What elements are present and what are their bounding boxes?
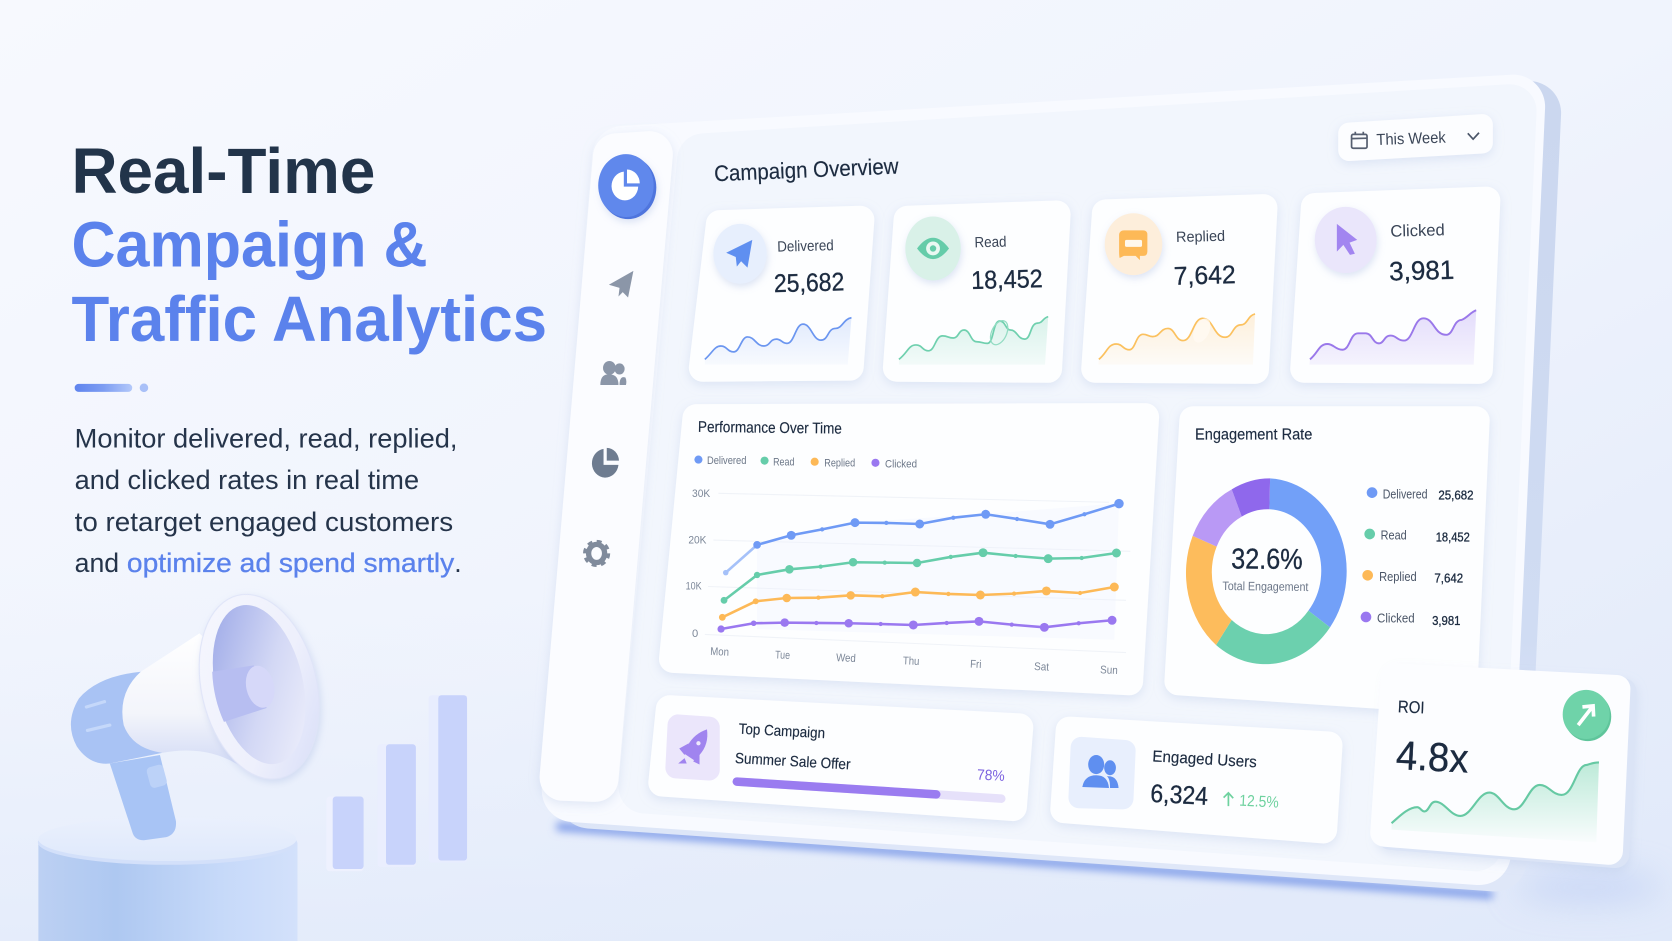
pedestal	[38, 817, 298, 941]
panel: read card: 18,452	[971, 265, 1043, 295]
description text: and	[75, 548, 119, 578]
donut legend: Read	[1381, 527, 1407, 542]
area under lines	[757, 503, 1119, 640]
panel: performance over time	[673, 417, 1145, 681]
panel: engaged users: 6,324	[1150, 780, 1209, 811]
panel: replied card: Replied	[1176, 228, 1225, 246]
sparkline: read	[899, 317, 1048, 365]
panel: sidebar	[563, 154, 656, 778]
donut legend	[1361, 486, 1474, 628]
sparkline: replied	[1098, 314, 1255, 365]
panel: engagement rate: Engagement Rate	[1195, 426, 1312, 443]
x axis labels: Thu	[903, 655, 920, 668]
donut legend: Replied	[1379, 569, 1417, 584]
date filter	[1349, 125, 1482, 150]
y axis labels	[686, 488, 711, 640]
icon: clicked cursor	[1315, 207, 1377, 273]
icon: send	[609, 271, 633, 298]
icon: megaphone	[71, 582, 336, 840]
panel: replied card	[1095, 208, 1264, 370]
description text: optimize ad spend smartly	[127, 548, 455, 578]
title: Campaign &	[71, 209, 428, 281]
series: delivered	[723, 499, 1124, 575]
icon: roi arrow	[1563, 690, 1611, 741]
panel: clicked card: 3,981	[1389, 255, 1455, 286]
panel: delivered card: 25,682	[774, 268, 845, 298]
panel: read card	[897, 214, 1057, 369]
series: clicked	[717, 616, 1117, 633]
donut legend: Clicked	[1377, 611, 1415, 626]
donut legend: Delivered	[1383, 486, 1427, 501]
panel: roi card	[1384, 677, 1623, 854]
donut centre value: 32.6%	[1231, 543, 1303, 576]
title: Traffic Analytics	[71, 283, 547, 355]
icon: audience	[600, 361, 626, 385]
description text: and clicked rates in real time	[75, 465, 419, 495]
panel: roi card: 4.8x	[1395, 732, 1470, 782]
panel: performance over time: Performance Over Time	[698, 419, 842, 438]
panel: roi card: ROI	[1397, 697, 1425, 717]
dashboard shadow	[557, 826, 1663, 902]
description text: to retarget engaged customers	[75, 507, 453, 537]
y axis labels: 30K	[692, 488, 711, 500]
chart legend	[694, 455, 917, 471]
panel: top campaign: 78%	[977, 767, 1005, 785]
x axis labels: Fri	[970, 659, 982, 671]
sparkline: roi	[1392, 762, 1599, 842]
sparkline: delivered	[705, 318, 851, 365]
panel: read card: Read	[974, 234, 1007, 251]
icon: rocket	[676, 725, 709, 770]
icon: read eye	[905, 216, 961, 280]
y axis labels: 20K	[688, 534, 707, 546]
date filter: This Week	[1376, 130, 1447, 149]
x axis labels: Wed	[836, 652, 856, 665]
progress bar	[737, 782, 1001, 799]
description text	[75, 423, 462, 578]
donut legend: 3,981	[1432, 613, 1460, 628]
panel: clicked card: Clicked	[1390, 220, 1445, 241]
icon: delivered plane	[713, 224, 767, 284]
dashboard frame	[574, 107, 1529, 859]
panel: delivered card: Delivered	[777, 237, 834, 256]
donut legend: 18,452	[1436, 529, 1470, 544]
y axis labels: 10K	[686, 581, 702, 593]
description text: .	[454, 548, 462, 578]
x axis labels	[710, 646, 1118, 677]
panel: top campaign	[662, 709, 1019, 807]
panel: clicked card	[1304, 200, 1486, 370]
panel: engaged users	[1064, 730, 1329, 830]
icon: active dashboard pie	[598, 154, 656, 219]
icon: engaged users	[1079, 747, 1125, 799]
y axis labels: 0	[692, 628, 698, 640]
divider accent	[75, 384, 148, 392]
icon: settings gear	[585, 542, 608, 565]
x axis labels: Tue	[775, 649, 790, 662]
icon: up arrow	[1224, 793, 1233, 806]
x axis labels: Sun	[1100, 664, 1118, 677]
donut centre value: Total Engagement	[1222, 579, 1309, 594]
x axis labels: Mon	[710, 646, 729, 659]
panel: engaged users: 12.5%	[1239, 793, 1279, 812]
line chart	[686, 488, 1130, 677]
description text: Monitor delivered, read, replied,	[75, 423, 457, 453]
x axis labels: Sat	[1034, 661, 1050, 674]
donut legend: 25,682	[1438, 487, 1474, 502]
icon: pie chart	[592, 448, 619, 478]
chart legend: Clicked	[885, 459, 917, 471]
donut centre value	[1222, 543, 1309, 594]
bar chart decoration	[326, 695, 467, 871]
icon: calendar	[1352, 132, 1367, 148]
panel: top campaign: Top Campaign	[738, 721, 825, 742]
donut chart	[1186, 478, 1347, 664]
panel: engaged users: Engaged Users	[1152, 748, 1257, 771]
sparkline: clicked	[1309, 310, 1476, 365]
donut legend: 7,642	[1434, 571, 1463, 586]
heading: campaign overview: Campaign Overview	[714, 154, 900, 186]
chart legend: Delivered	[707, 455, 746, 467]
chart legend: Read	[773, 456, 794, 468]
panel: replied card: 7,642	[1173, 261, 1236, 291]
panel: delivered card	[703, 220, 861, 368]
panel: engagement rate	[1178, 420, 1476, 701]
series: read	[721, 548, 1121, 604]
icon: chevron	[1468, 133, 1479, 139]
title	[71, 135, 547, 355]
panel: top campaign: Summer Sale Offer	[734, 750, 851, 773]
icon: replied bubble	[1105, 213, 1162, 275]
title: Real-Time	[71, 135, 375, 207]
series: replied	[719, 583, 1119, 621]
chart legend: Replied	[824, 458, 855, 470]
